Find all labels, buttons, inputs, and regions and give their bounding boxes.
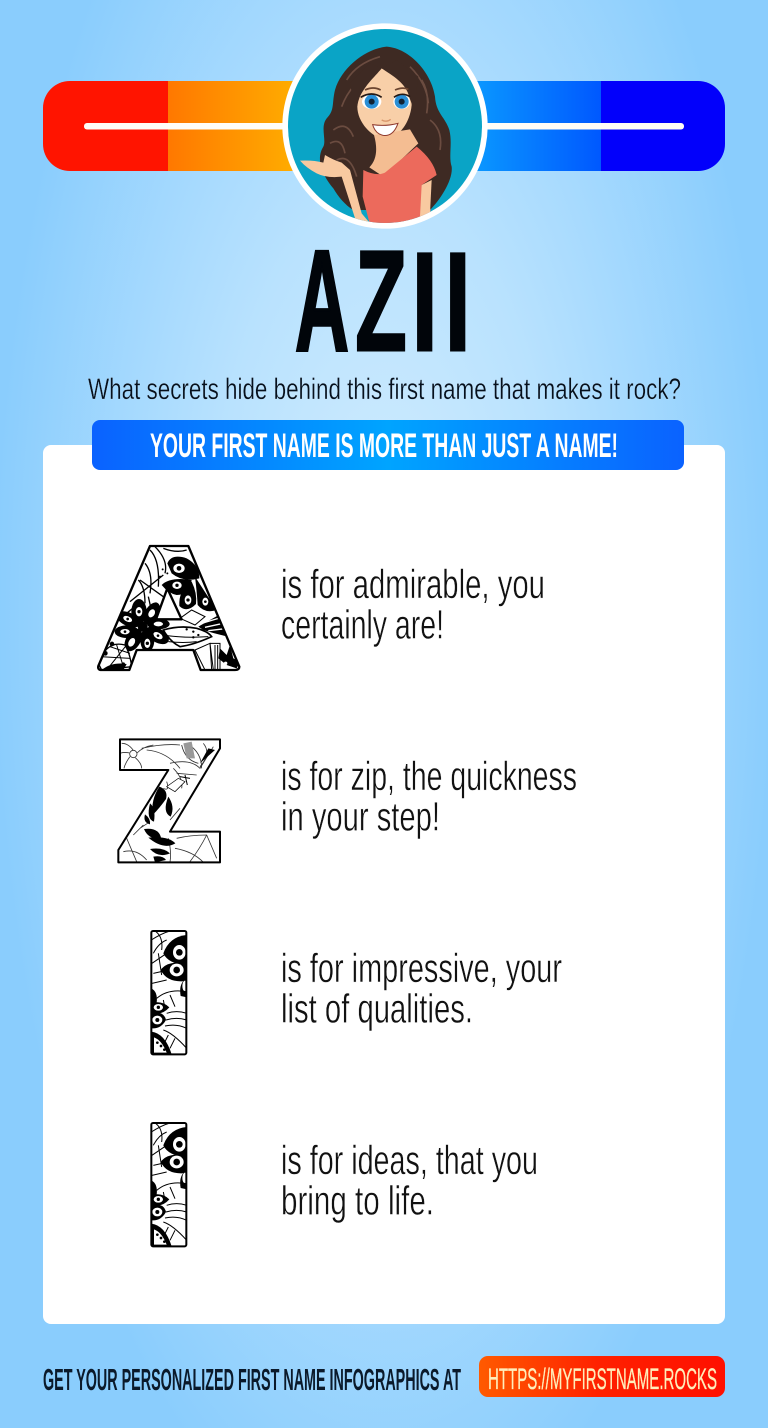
text: second I meaning: is for ideas, that you — [281, 1137, 538, 1183]
icon: second patterned letter I — [151, 1123, 188, 1246]
title: I — [443, 222, 472, 382]
white content card — [43, 445, 725, 1324]
title: I — [410, 222, 439, 382]
text: A meaning: certainly are! — [281, 602, 444, 648]
text: A meaning: is for admirable, you — [281, 561, 545, 607]
title — [295, 220, 472, 382]
icon: patterned letter I — [151, 931, 188, 1054]
banner — [92, 420, 684, 470]
icon: patterned letter Z — [117, 738, 221, 864]
title: Z — [355, 220, 407, 382]
text: second I meaning: bring to life. — [281, 1178, 434, 1224]
icon: patterned letter A — [97, 544, 240, 672]
text: first I meaning: is for impressive, your — [281, 945, 562, 991]
text: first I meaning: list of qualities. — [281, 986, 473, 1032]
avatar portrait — [282, 23, 488, 229]
title: A — [295, 220, 349, 382]
text: Z meaning: in your step! — [281, 794, 440, 840]
header colour bar — [43, 81, 725, 171]
white line across bar — [84, 123, 684, 130]
text: Z meaning: is for zip, the quickness — [281, 753, 577, 799]
footer url button — [479, 1356, 725, 1397]
